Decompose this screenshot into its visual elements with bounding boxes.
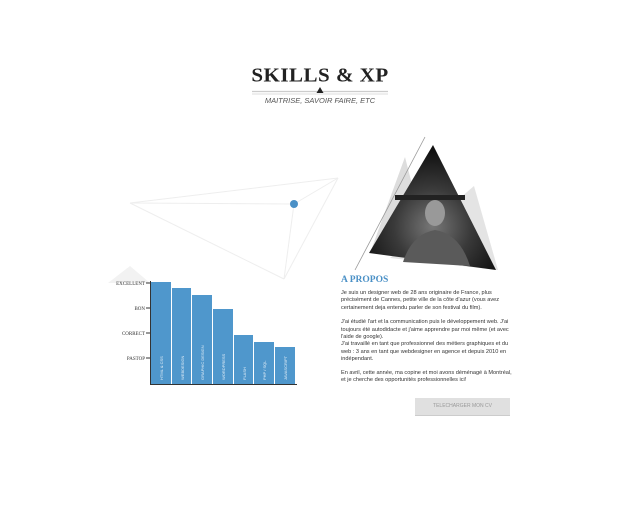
title: SKILLS & XP xyxy=(251,64,389,86)
title underline with triangle xyxy=(252,87,388,94)
about text: En avril, cette année, ma copine et moi avons déménagé à Montréal, et je cherche des opportunités professionnelles ici! xyxy=(341,370,512,383)
bar chart: JAVASCRIPT xyxy=(283,355,288,380)
about heading: A PROPOS xyxy=(341,275,388,285)
bar chart: PASTOP xyxy=(127,357,145,362)
about text: J'ai étudié l'art et la communication puis le développement web. J'ai toujours été autodidacte et j'aime apprendre par moi même (et avec l'aide de google). xyxy=(341,319,509,340)
download button xyxy=(415,398,510,416)
bar chart: HTML & CSS xyxy=(159,356,164,380)
bar chart: PHP / SQL xyxy=(262,360,267,380)
bar chart: FLASH xyxy=(242,367,247,380)
bar chart: CORRECT xyxy=(122,332,145,337)
bar chart: WORDPRESS xyxy=(221,353,226,380)
bar chart: EXCELLENT xyxy=(116,282,145,287)
subtitle: MAITRISE, SAVOIR FAIRE, ETC xyxy=(265,96,375,105)
bar chart: WEBDESIGN xyxy=(180,355,185,380)
bar chart: BON xyxy=(134,307,145,312)
about text: Je suis un designer web de 28 ans originaire de France, plus précisément de Cannes, petite ville de la côte d'azur (vous avez certainement deja entendu parler de son festival du film). xyxy=(341,290,499,311)
about text: J'ai travaillé en tant que professionnel des métiers graphiques et du web : 3 ans en tant que webdesigner en agence et depuis 2010 en indépendant. xyxy=(341,341,508,362)
bar chart: GRAPHIC DESIGN xyxy=(200,345,205,380)
about text xyxy=(341,290,512,383)
download button: TELECHARGER MON CV xyxy=(433,403,492,409)
